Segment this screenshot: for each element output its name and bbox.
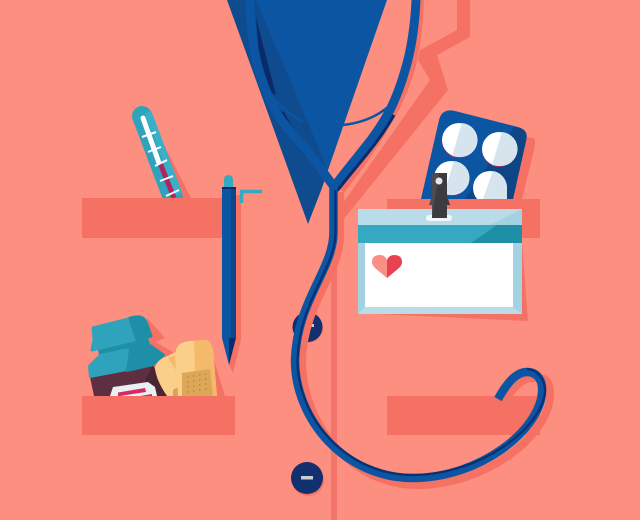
coat centre seam bbox=[331, 190, 337, 520]
collar: V neck bbox=[227, 0, 387, 224]
thin wires bbox=[273, 97, 388, 125]
right tube shadow bbox=[341, 0, 420, 190]
right headset tube bbox=[334, 0, 416, 187]
icon: heart bbox=[372, 255, 402, 278]
right lapel bbox=[343, 0, 470, 220]
pocket: top right bbox=[387, 199, 540, 238]
right tube dark edge bbox=[337, 115, 394, 191]
pen bbox=[222, 175, 262, 373]
bandages bbox=[155, 340, 225, 396]
stethoscope lower tube shadow bbox=[302, 192, 550, 485]
pill bottle bbox=[89, 317, 173, 396]
lower coat button bbox=[291, 462, 324, 496]
main lower tube bbox=[295, 186, 542, 478]
thermometer bbox=[142, 112, 191, 198]
badge clip bbox=[426, 173, 452, 221]
pill blister pack bbox=[421, 110, 535, 205]
pocket: top left bbox=[82, 198, 224, 238]
left headset tube bbox=[250, 0, 335, 188]
ID badge bbox=[358, 173, 522, 314]
ID badge shadow bbox=[375, 243, 528, 321]
lower tube dark edge bbox=[298, 190, 545, 475]
stethoscope bbox=[250, 0, 545, 478]
illustration: doctor's coat bbox=[82, 0, 554, 520]
pocket: bottom right bbox=[387, 396, 540, 435]
pocket: bottom left bbox=[82, 396, 235, 435]
upper coat button bbox=[292, 312, 323, 343]
